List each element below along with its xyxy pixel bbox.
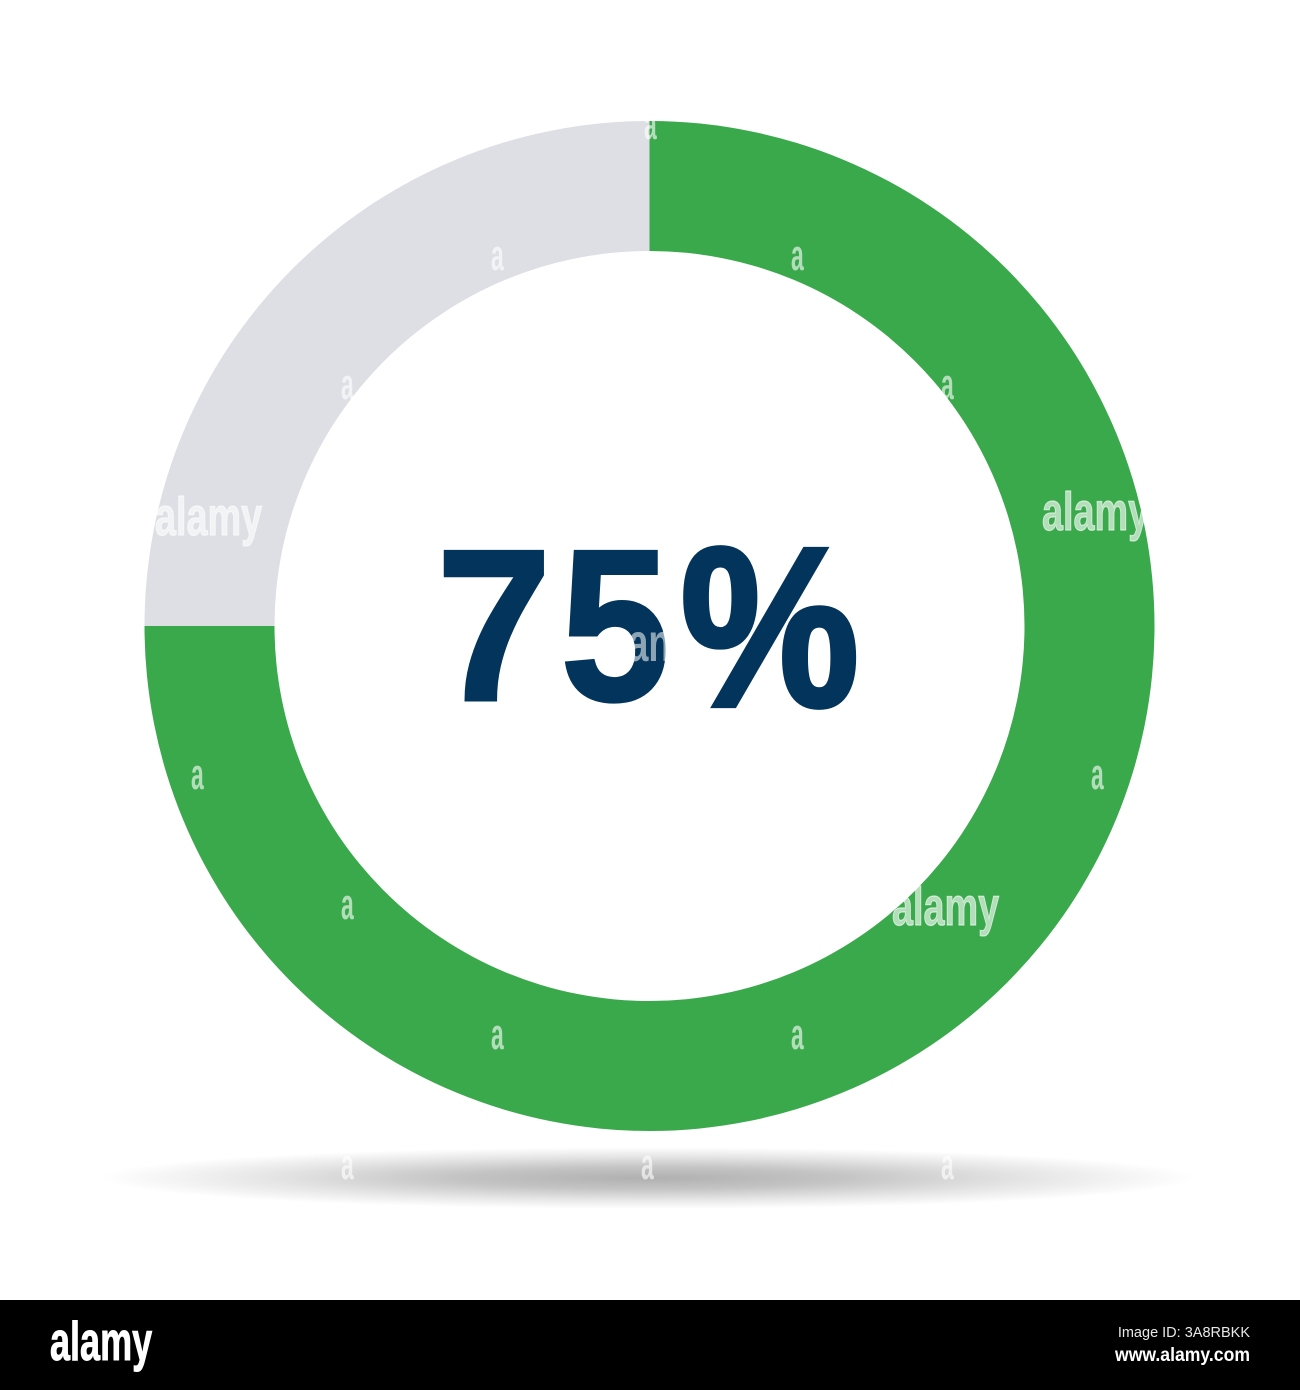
stock watermarks: a (1091, 750, 1104, 799)
stock watermarks: alamy (155, 486, 262, 547)
percentage value: % (680, 501, 859, 754)
stock watermarks: a (341, 1140, 354, 1189)
remaining 25 percent track (144, 121, 650, 626)
stock watermarks: a (791, 1010, 804, 1059)
footer logo: alamy (50, 1310, 152, 1372)
stock watermarks: a (644, 100, 657, 149)
percentage value: 5 (560, 504, 670, 746)
percentage value: 7 (436, 504, 552, 746)
stock watermarks: an (628, 612, 671, 673)
green 75 percent arc (144, 121, 1154, 1131)
donut chart: 75 percent (144, 121, 1154, 1131)
stock watermarks: alamy (1042, 481, 1149, 542)
stock watermarks: a (191, 750, 204, 799)
stock watermarks: alamy (892, 876, 999, 937)
stock watermarks: a (791, 231, 804, 280)
stock watermarks: a (491, 1010, 504, 1059)
stock watermarks (155, 100, 1149, 1189)
footer bar (0, 1300, 1300, 1390)
stock watermarks: a (341, 880, 354, 929)
percentage value (436, 501, 859, 754)
stock watermarks: a (491, 231, 504, 280)
stock watermarks: a (341, 360, 354, 409)
stock watermarks: a (941, 360, 954, 409)
drop shadow below ring (100, 1147, 1196, 1209)
website: www.alamy.com (1114, 1345, 1250, 1366)
image id: Image ID: 3A8RBKK (1118, 1325, 1250, 1341)
stock watermarks: a (941, 1140, 954, 1189)
stock watermarks: a (641, 1140, 654, 1189)
